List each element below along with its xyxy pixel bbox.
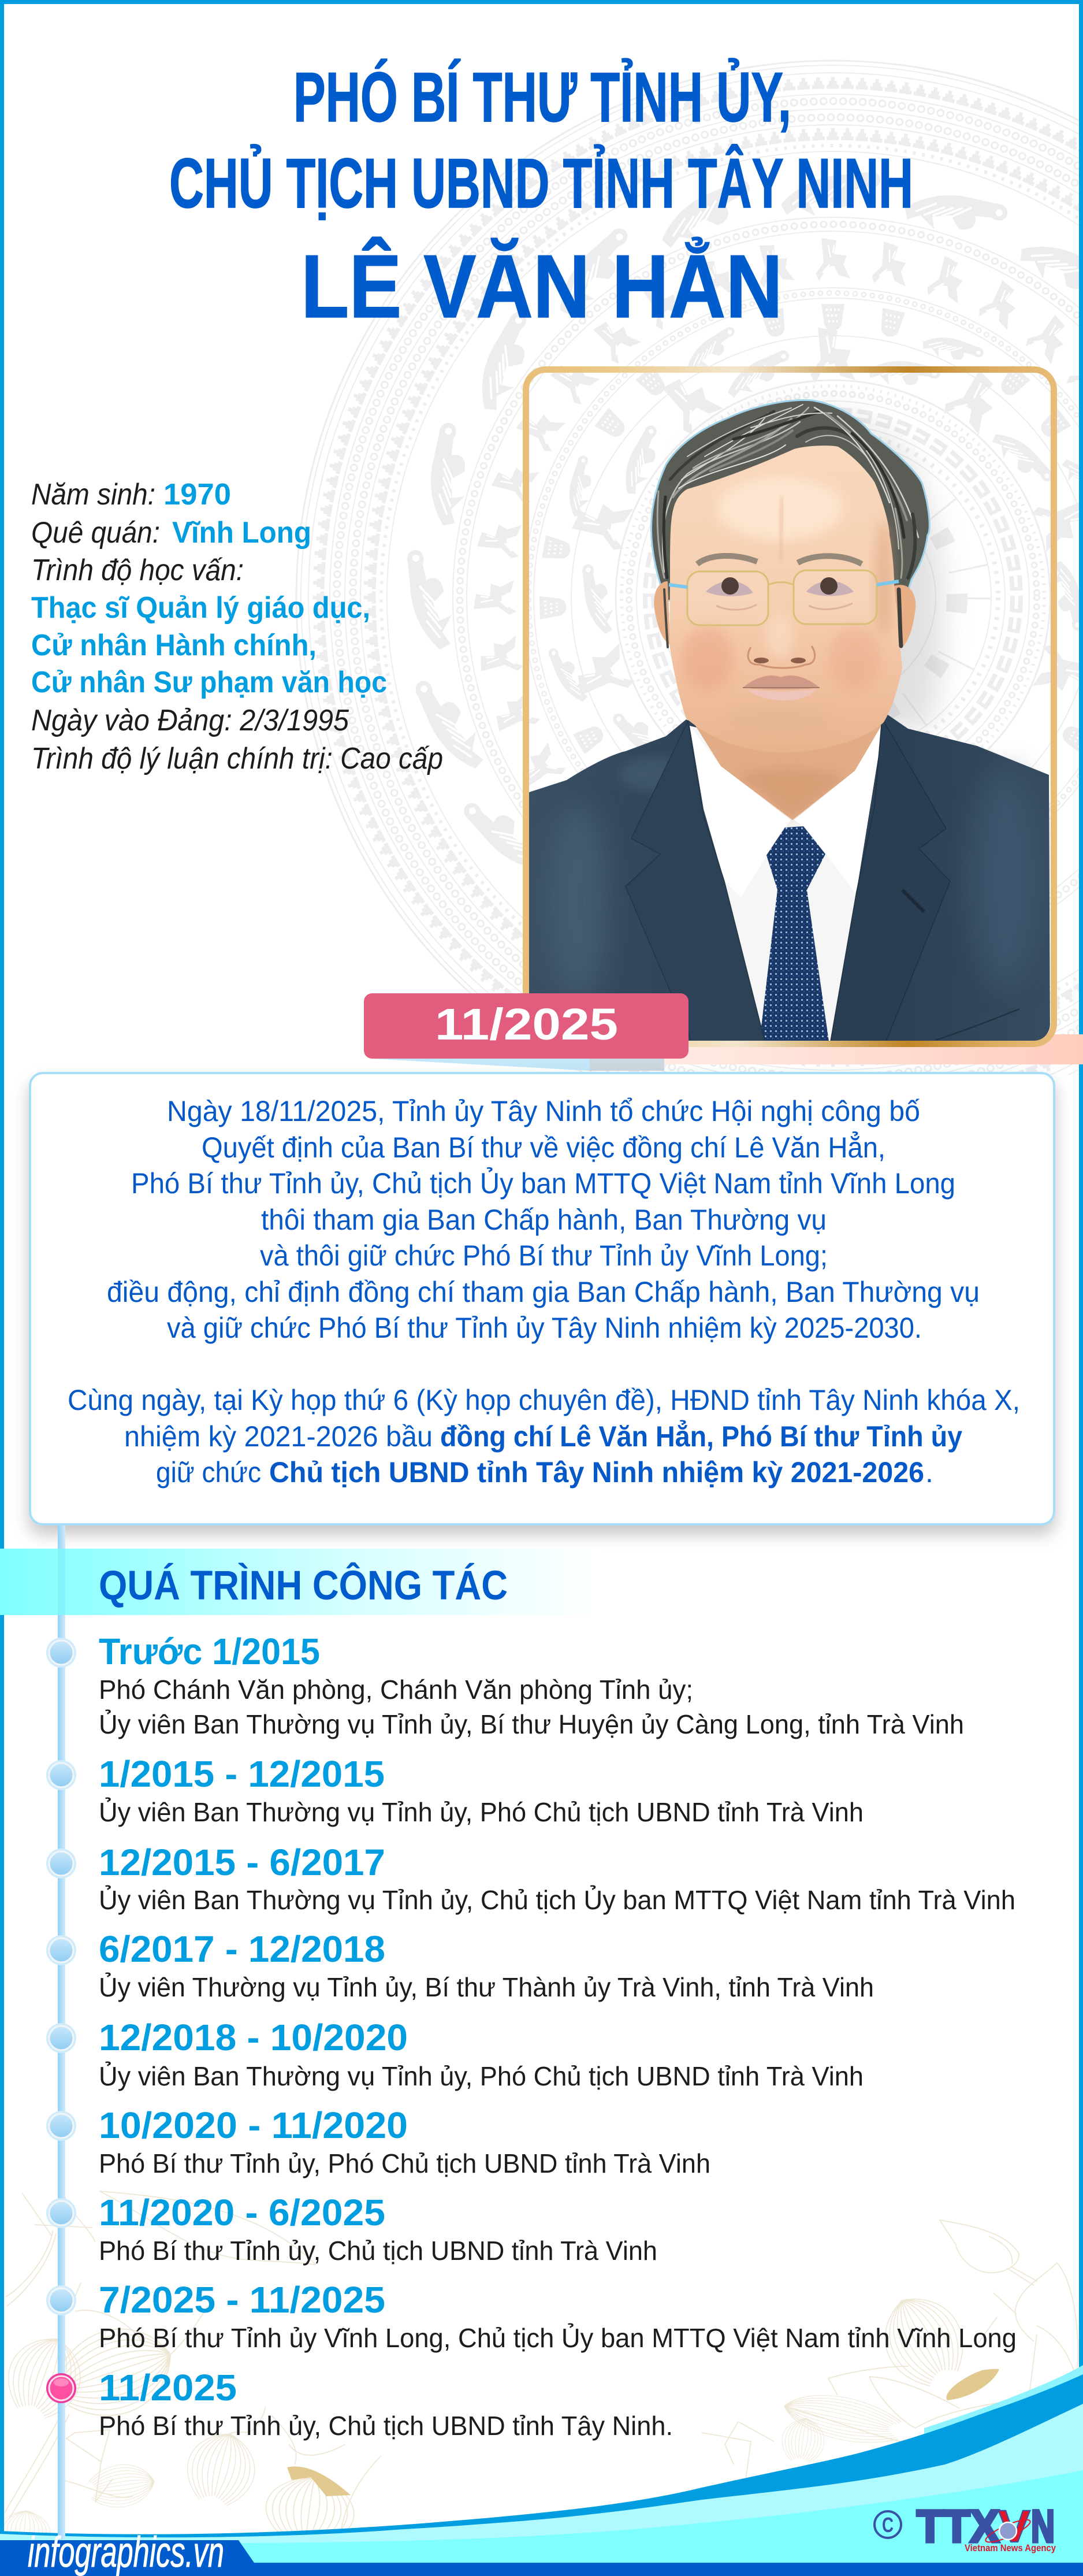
panel: announcement: Ngày 18/11/2025, Tỉnh ủy Tây Ninh tổ chức Hội nghị công bố — [167, 1095, 920, 1127]
timeline item: 11/2020 - 6/2025: Phó Bí thư Tỉnh ủy, Chủ tịch UBND tỉnh Trà Vinh — [99, 2236, 657, 2266]
face shading — [682, 477, 893, 733]
timeline item: 12/2018 - 10/2020: 12/2018 - 10/2020 — [99, 2017, 408, 2058]
timeline item: 7/2025 - 11/2025: 7/2025 - 11/2025 — [99, 2279, 385, 2321]
panel: announcement: và giữ chức Phó Bí thư Tỉnh ủy Tây Ninh nhiệm kỳ 2025-2030. — [167, 1312, 922, 1344]
timeline item: 1/2015 - 12/2015: Ủy viên Ban Thường vụ Tỉnh ủy, Phó Chủ tịch UBND tỉnh Trà Vinh — [99, 1797, 864, 1827]
panel: announcement: Chủ tịch UBND tỉnh Tây Ninh nhiệm kỳ 2021-2026 — [269, 1456, 924, 1489]
background: Dong Son bronze drum pattern — [296, 61, 1083, 1134]
timeline item: 6/2017 - 12/2018: 6/2017 - 12/2018 — [99, 1928, 385, 1970]
timeline item: Trước 1/2015 — [46, 1631, 964, 1739]
nose — [748, 613, 815, 668]
panel: announcement: Phó Bí thư Tỉnh ủy, Chủ tịch Ủy ban MTTQ Việt Nam tỉnh Vĩnh Long — [131, 1167, 955, 1200]
personal info: Năm sinh: — [31, 478, 155, 511]
personal info: 1970 — [163, 478, 231, 511]
lapel left — [626, 721, 765, 1041]
title — [169, 58, 913, 336]
neck — [695, 725, 881, 820]
personal info: Cử nhân Sư phạm văn học — [31, 666, 387, 699]
jacket — [529, 715, 1050, 1041]
timeline item: 7/2025 - 11/2025 — [46, 2279, 1017, 2353]
logo: TTXVN: N — [1031, 2500, 1055, 2552]
eyebrows — [697, 556, 862, 564]
panel: announcement: Cùng ngày, tại Kỳ họp thứ 6 (Kỳ họp chuyên đề), HĐND tỉnh Tây Ninh khóa X, — [68, 1384, 1020, 1416]
decorative pink band behind portrait — [370, 1034, 1083, 1071]
panel: announcement — [30, 1073, 1054, 1524]
hair back — [651, 400, 929, 613]
date badge: 11/2025 — [435, 1000, 618, 1049]
ears — [654, 581, 670, 645]
personal info: Trình độ học vấn: — [31, 554, 244, 587]
eyes — [706, 577, 854, 610]
timeline item: 11/2020 - 6/2025 — [46, 2192, 657, 2266]
timeline item: 7/2025 - 11/2025: Phó Bí thư Tỉnh ủy Vĩnh Long, Chủ tịch Ủy ban MTTQ Việt Nam tỉnh Vĩnh Long — [99, 2323, 1017, 2353]
personal info: Thạc sĩ Quản lý giáo dục, — [31, 591, 370, 625]
section heading band — [0, 1549, 601, 1615]
logo: TTXVN — [874, 2500, 1056, 2553]
timeline item: 11/2025 (current): Phó Bí thư Tỉnh ủy, Chủ tịch UBND tỉnh Tây Ninh. — [99, 2411, 673, 2441]
title: LÊ VĂN HẲN — [301, 236, 783, 336]
panel: announcement: đồng chí Lê Văn Hẳn, Phó Bí thư Tỉnh ủy — [440, 1420, 962, 1453]
timeline item: 6/2017 - 12/2018 — [46, 1928, 874, 2002]
panel: announcement: giữ chức — [156, 1456, 261, 1489]
timeline item: 12/2015 - 6/2017 — [46, 1842, 1015, 1915]
timeline item: 6/2017 - 12/2018: Ủy viên Thường vụ Tỉnh ủy, Bí thư Thành ủy Trà Vinh, tỉnh Trà Vinh — [99, 1972, 874, 2002]
head shadow — [835, 406, 952, 733]
panel: announcement: điều động, chỉ định đồng chí tham gia Ban Chấp hành, Ban Thường vụ — [107, 1276, 980, 1308]
timeline item: 12/2018 - 10/2020: Ủy viên Ban Thường vụ Tỉnh ủy, Phó Chủ tịch UBND tỉnh Trà Vinh — [99, 2061, 864, 2091]
timeline item: 12/2015 - 6/2017: Ủy viên Ban Thường vụ Tỉnh ủy, Chủ tịch Ủy ban MTTQ Việt Nam tỉnh Trà Vinh — [99, 1885, 1015, 1915]
timeline item: 1/2015 - 12/2015: 1/2015 - 12/2015 — [99, 1753, 385, 1795]
background: lotus line art — [0, 2191, 1078, 2552]
timeline item: 10/2020 - 11/2020: 10/2020 - 11/2020 — [99, 2104, 408, 2146]
portrait photo — [529, 400, 1050, 1041]
logo: TTXVN: C — [882, 2513, 894, 2537]
timeline line — [58, 1525, 65, 2540]
panel: announcement: và thôi giữ chức Phó Bí thư Tỉnh ủy Vĩnh Long; — [260, 1239, 828, 1272]
timeline item: 10/2020 - 11/2020 — [46, 2104, 710, 2178]
bottom wave bands — [0, 2365, 1083, 2576]
panel: announcement: Quyết định của Ban Bí thư về việc đồng chí Lê Văn Hẳn, — [202, 1131, 885, 1164]
title: PHÓ BÍ THƯ TỈNH ỦY, — [293, 58, 791, 136]
shirt — [690, 722, 884, 1041]
lapel right — [831, 718, 950, 1041]
timeline item: Trước 1/2015: Ủy viên Ban Thường vụ Tỉnh ủy, Bí thư Huyện ủy Càng Long, tỉnh Trà Vinh — [99, 1709, 964, 1739]
logo: TTXVN: TTX — [917, 2500, 999, 2552]
timeline item: 10/2020 - 11/2020: Phó Bí thư Tỉnh ủy, Phó Chủ tịch UBND tỉnh Trà Vinh — [99, 2148, 710, 2178]
panel: announcement: thôi tham gia Ban Chấp hành, Ban Thường vụ — [261, 1204, 827, 1236]
portrait gold frame — [526, 370, 1054, 1044]
footer tab: infographics.vn: infographics.vn — [28, 2528, 224, 2576]
logo: TTXVN: V — [998, 2500, 1030, 2552]
timeline item: 11/2025 (current) — [46, 2367, 673, 2441]
timeline item: Trước 1/2015: Trước 1/2015 — [99, 1631, 320, 1672]
personal info — [31, 478, 443, 775]
timeline item: 11/2020 - 6/2025: 11/2020 - 6/2025 — [99, 2192, 385, 2233]
glasses — [669, 570, 899, 625]
personal info: Trình độ lý luận chính trị: Cao cấp — [31, 742, 443, 775]
face — [669, 446, 902, 752]
timeline item: 12/2018 - 10/2020 — [46, 2017, 864, 2091]
logo: TTXVN: Vietnam News Agency — [965, 2542, 1056, 2553]
timeline item: 1/2015 - 12/2015 — [46, 1753, 864, 1827]
hair strands — [657, 404, 918, 647]
timeline item: 11/2025 (current): 11/2025 — [99, 2367, 237, 2408]
collar — [690, 726, 791, 897]
timeline item: 12/2015 - 6/2017: 12/2015 - 6/2017 — [99, 1842, 385, 1883]
personal info: Quê quán: — [31, 516, 160, 550]
personal info: Cử nhân Hành chính, — [31, 629, 317, 662]
date badge — [364, 993, 688, 1059]
personal info: Vĩnh Long — [172, 516, 311, 550]
tie — [760, 826, 829, 1041]
mouth — [743, 675, 820, 700]
panel: announcement: nhiệm kỳ 2021-2026 bầu — [124, 1420, 433, 1453]
personal info: Ngày vào Đảng: 2/3/1995 — [31, 704, 349, 737]
timeline item: Trước 1/2015: Phó Chánh Văn phòng, Chánh Văn phòng Tỉnh ủy; — [99, 1675, 693, 1705]
section heading band: QUÁ TRÌNH CÔNG TÁC — [99, 1562, 508, 1609]
panel: announcement: . — [925, 1456, 933, 1489]
